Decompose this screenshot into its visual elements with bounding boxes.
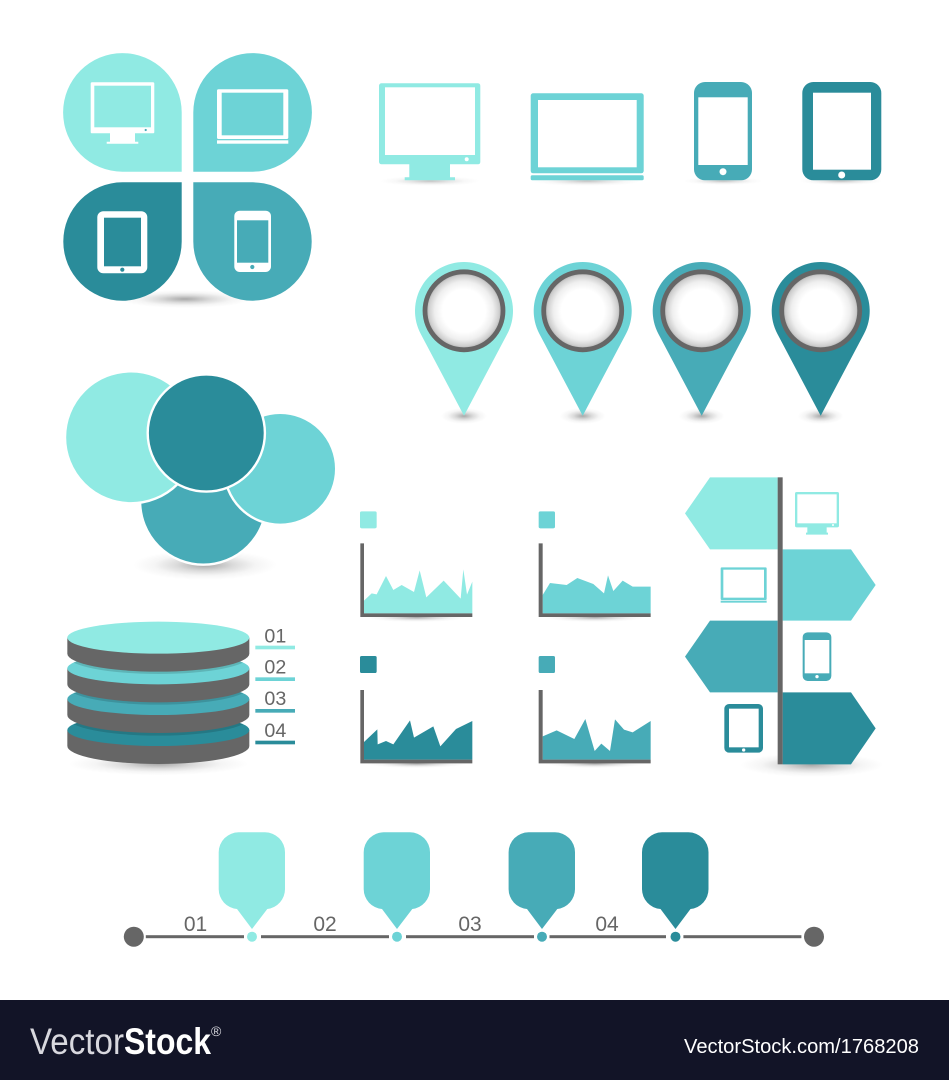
signpost pole <box>778 477 783 764</box>
stack labels: 04 <box>264 720 286 742</box>
icon: monitor <box>795 492 839 535</box>
marker 02 <box>364 832 430 942</box>
footer logo: Vector <box>30 1021 124 1062</box>
footer bar <box>0 1000 949 1080</box>
icon: tablet <box>802 82 881 180</box>
panel: map pins <box>415 262 870 424</box>
pin 3 <box>653 262 751 424</box>
layer 03 <box>67 692 250 733</box>
panel: area charts <box>360 511 651 768</box>
timeline labels: 04 <box>595 913 619 936</box>
layer 02 <box>67 662 250 702</box>
petal: tablet <box>63 182 182 301</box>
icon: phone <box>803 632 831 681</box>
arrow 3 <box>685 621 778 692</box>
chart 1 <box>360 511 472 622</box>
icon: laptop <box>721 567 767 603</box>
marker 03 <box>509 832 575 942</box>
chart 3 <box>360 656 472 768</box>
panel: timeline <box>124 832 824 947</box>
arrow 4 <box>783 692 876 764</box>
stack labels: 03 <box>264 688 286 710</box>
icon: monitor <box>379 83 480 180</box>
panel: four-petal device clover <box>63 53 312 308</box>
timeline labels: 01 <box>184 913 207 936</box>
panel: overlapping circles <box>65 371 336 580</box>
pin 1 <box>415 262 513 424</box>
layer 04 <box>67 723 250 764</box>
arrow 1 <box>685 477 778 549</box>
icon: phone <box>694 82 752 180</box>
layer 01 <box>67 622 249 672</box>
icon: tablet <box>724 704 763 753</box>
panel: device icon row <box>379 82 883 186</box>
stack labels: 02 <box>264 656 286 678</box>
panel: layered stack with labels <box>67 622 295 775</box>
timeline line <box>124 927 824 947</box>
petal: phone <box>193 182 312 301</box>
marker 01 <box>219 832 285 942</box>
petal: laptop <box>193 53 312 172</box>
footer logo: ® <box>211 1023 222 1039</box>
stack labels: 01 <box>264 625 286 647</box>
timeline labels: 02 <box>313 913 337 936</box>
marker 04 <box>642 832 709 942</box>
chart 2 <box>539 511 651 622</box>
icon: laptop <box>531 93 644 180</box>
footer image id: VectorStock.com/1768208 <box>684 1036 919 1058</box>
timeline labels: 03 <box>458 913 482 936</box>
pin 2 <box>534 262 632 424</box>
footer logo: Stock <box>124 1021 211 1062</box>
footer logo <box>30 1021 222 1062</box>
panel: signpost arrows with device icons <box>685 477 883 777</box>
chart 4 <box>539 656 651 768</box>
pin 4 <box>772 262 870 424</box>
arrow 2 <box>783 549 876 621</box>
timeline labels <box>184 913 619 936</box>
stack labels <box>255 625 295 744</box>
petal: monitor <box>63 53 182 172</box>
